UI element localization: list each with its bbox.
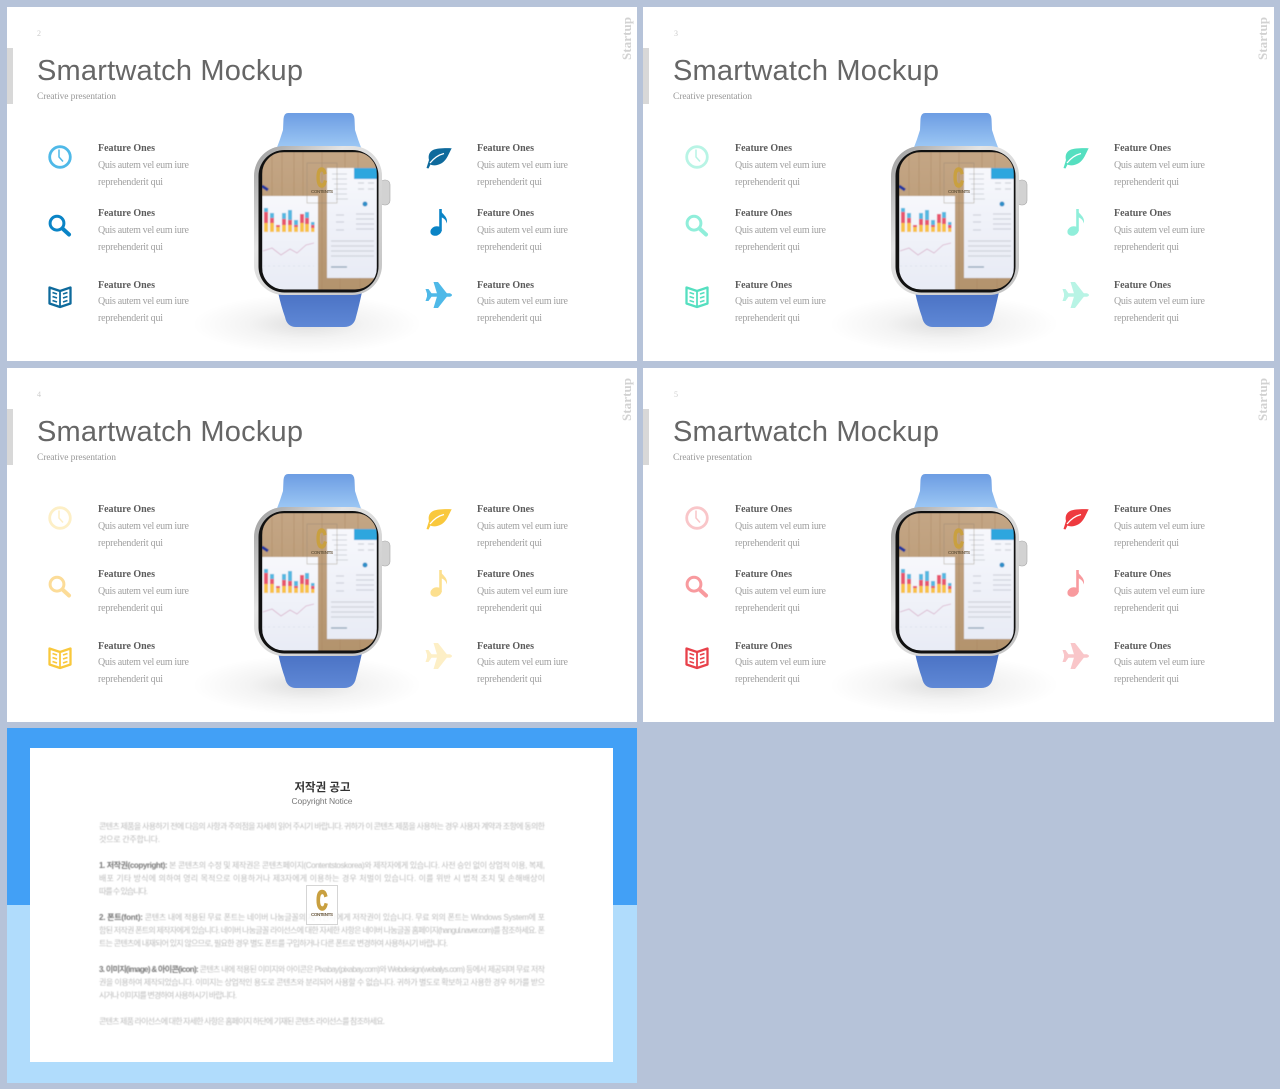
closing line: 콘텐츠 제품 라이선스에 대한 자세한 사항은 홈페이지 하단에 기재된 콘텐츠 라이선스를 참조하세요. <box>99 1016 385 1026</box>
icon: book <box>686 648 708 668</box>
side label: Startup <box>619 378 634 421</box>
feature 3 <box>735 280 827 324</box>
feature 5 <box>1114 208 1206 253</box>
feature 4: Feature Ones <box>477 143 534 154</box>
feature 4 <box>1114 143 1206 188</box>
title: Smartwatch Mockup <box>673 55 939 87</box>
feature 5: Quis autem vel eum iure <box>477 586 569 597</box>
watermark logo <box>306 886 338 924</box>
watch mockup: CONTENTS <box>948 550 970 555</box>
feature 1: Feature Ones <box>735 504 792 515</box>
page number: 2 <box>37 29 41 38</box>
feature 4: reprehenderit qui <box>477 177 542 188</box>
feature 6: Feature Ones <box>1114 641 1171 652</box>
feature 1: Feature Ones <box>98 504 155 515</box>
side label: Startup <box>619 17 634 60</box>
side label: Startup <box>1255 17 1270 60</box>
feature 1 <box>735 143 827 188</box>
title: Smartwatch Mockup <box>37 55 303 87</box>
panel: slide 2 blue <box>7 7 637 361</box>
feature 5 <box>1114 569 1206 614</box>
feature 6: Feature Ones <box>1114 280 1171 291</box>
feature 6 <box>1114 641 1206 685</box>
feature 5: reprehenderit qui <box>477 603 542 614</box>
feature 5: Feature Ones <box>477 208 534 219</box>
page number: 4 <box>37 390 41 399</box>
feature 4: Feature Ones <box>1114 504 1171 515</box>
panel: slide 4 yellow <box>7 368 637 722</box>
watch mockup: CONTENTS <box>311 189 333 194</box>
paragraph: copyright <box>99 860 545 896</box>
watch mockup: CONTENTS <box>948 189 970 194</box>
icon: plane <box>1062 282 1089 308</box>
feature 1 <box>98 143 190 188</box>
feature 2: reprehenderit qui <box>98 242 163 253</box>
paragraph: images and icons: 권을 이용하여 제작되었습니다. 이미지는 상업적인 용도로 콘텐츠와 분리되어 사용할 수 없습니다. 귀하가 별도로 확보하고 사용한 경우 허가를 받으 <box>99 977 545 987</box>
feature 1: reprehenderit qui <box>735 177 800 188</box>
icon: leaf <box>426 509 452 530</box>
feature 1: reprehenderit qui <box>735 538 800 549</box>
watch mockup <box>192 474 422 715</box>
feature 1 <box>735 504 827 549</box>
feature 3: reprehenderit qui <box>98 313 163 324</box>
feature 4 <box>1114 504 1206 549</box>
feature 4: Quis autem vel eum iure <box>1114 160 1206 171</box>
icon: leaf <box>1064 148 1089 168</box>
feature 2 <box>98 208 190 253</box>
icon: leaf <box>1064 509 1089 530</box>
page number: 5 <box>674 390 678 399</box>
feature 1: Feature Ones <box>98 143 155 154</box>
icon: clock <box>687 147 707 167</box>
watch mockup: C <box>953 524 964 557</box>
paragraph: images and icons: 시거나 이미지를 변경하여 사용하시기 바랍니다. <box>99 990 237 1000</box>
subtitle: Creative presentation <box>673 92 752 102</box>
feature 1: reprehenderit qui <box>98 177 163 188</box>
feature 4: Quis autem vel eum iure <box>477 160 569 171</box>
feature 3: reprehenderit qui <box>735 674 800 685</box>
feature 3: Quis autem vel eum iure <box>98 657 190 668</box>
feature 3 <box>98 641 190 685</box>
feature 6: Quis autem vel eum iure <box>1114 296 1206 307</box>
feature 5: Feature Ones <box>1114 208 1171 219</box>
feature 1 <box>98 504 190 549</box>
feature 5 <box>477 569 569 614</box>
feature 5: Quis autem vel eum iure <box>477 225 569 236</box>
feature 3: Feature Ones <box>735 280 792 291</box>
watch mockup: C <box>316 524 327 557</box>
copyright heading: 저작권 공고 <box>294 780 351 794</box>
watermark logo: CONTENTS <box>311 912 333 917</box>
icon: music note <box>1066 570 1084 598</box>
feature 5 <box>477 208 569 253</box>
feature 3 <box>735 641 827 685</box>
feature 4: Quis autem vel eum iure <box>1114 521 1206 532</box>
feature 3: reprehenderit qui <box>98 674 163 685</box>
feature 5: reprehenderit qui <box>1114 242 1179 253</box>
feature 6: Quis autem vel eum iure <box>1114 657 1206 668</box>
feature 5: Quis autem vel eum iure <box>1114 225 1206 236</box>
feature 1: Quis autem vel eum iure <box>98 521 190 532</box>
feature 2: Feature Ones <box>98 208 155 219</box>
feature 6: Feature Ones <box>477 280 534 291</box>
title: Smartwatch Mockup <box>673 416 939 448</box>
icon: music note <box>429 570 447 598</box>
feature 6 <box>477 641 569 685</box>
feature 5: reprehenderit qui <box>1114 603 1179 614</box>
icon: clock <box>687 508 707 528</box>
paragraph: copyright: 따를 수 있습니다. <box>99 886 148 896</box>
feature 3: Quis autem vel eum iure <box>735 657 827 668</box>
paragraph: images and icons: 3. 이미지(image) & 아이콘(icon): 콘텐츠 내에 적용된 이미지와 아이콘은 Pixabay(pixabay.com)와 Webdesign(webalys.com) 등에서 제공되며 무료 저작 <box>99 964 546 974</box>
feature 2 <box>98 569 190 614</box>
feature 4 <box>477 143 569 188</box>
icon: book <box>50 648 70 668</box>
feature 6: reprehenderit qui <box>1114 313 1179 324</box>
paragraph: font: 함된 저작권 폰트의 제작자에게 있습니다. 네이버 나눔글꼴 라이선스에 대한 자세한 사항은 네이버 나눔글꼴 홈페이지(hangul.naver.com)를 참조하세요. 폰 <box>99 925 545 935</box>
feature 1: Quis autem vel eum iure <box>735 521 827 532</box>
feature 2: Feature Ones <box>735 569 792 580</box>
feature 6 <box>477 280 569 324</box>
feature 2: reprehenderit qui <box>98 603 163 614</box>
icon: search <box>50 216 69 234</box>
feature 4: reprehenderit qui <box>1114 177 1179 188</box>
watch mockup <box>192 113 422 354</box>
feature 1: Quis autem vel eum iure <box>98 160 190 171</box>
paragraph: font: 트는 콘텐츠에 내재되어 있지 않으므로, 필요한 경우 별도 폰트를 구입하거나 다른 폰트로 변경하여 사용하시기 바랍니다. <box>99 938 448 948</box>
subtitle: Creative presentation <box>37 453 116 463</box>
paragraph: copyright: 배포 기타 방식에 의하여 영리 목적으로 이용하거나 제3자에게 이용하는 경우 처벌이 있습니다. 이를 위반 시 법적 조치 및 손해배상이 <box>99 873 545 883</box>
feature 1: Feature Ones <box>735 143 792 154</box>
feature 4: Quis autem vel eum iure <box>477 521 569 532</box>
feature 2: Feature Ones <box>735 208 792 219</box>
paragraph: images and icons <box>99 964 546 1000</box>
icon: clock <box>50 508 70 528</box>
feature 6 <box>1114 280 1206 324</box>
icon: music note <box>429 209 447 237</box>
watch mockup <box>829 474 1059 715</box>
feature 5: reprehenderit qui <box>477 242 542 253</box>
intro paragraph: 콘텐츠 제품을 사용하기 전에 다음의 사항과 주의점을 자세히 읽어 주시기 바랍니다. 귀하가 이 콘텐츠 제품을 사용하는 경우 사용자 계약과 조항에 동의한 <box>99 821 546 831</box>
feature 2: reprehenderit qui <box>735 242 800 253</box>
copyright subheading: Copyright Notice <box>292 796 353 806</box>
feature 5: Feature Ones <box>1114 569 1171 580</box>
panel: copyright notice <box>7 728 637 1083</box>
feature 3: Quis autem vel eum iure <box>98 296 190 307</box>
paragraph: copyright: 1. 저작권(copyright): 본 콘텐츠의 수정 및 제작권은 콘텐츠페이지(Contentstoskorea)와 제작자에게 있습니다. 사전 승인 없이 상업적 이용, 복제, <box>99 860 545 870</box>
icon: clock <box>50 147 70 167</box>
feature 6: reprehenderit qui <box>477 313 542 324</box>
panel: slide 3 mint <box>643 7 1274 361</box>
feature 1: Quis autem vel eum iure <box>735 160 827 171</box>
feature 3: reprehenderit qui <box>735 313 800 324</box>
feature 5: Quis autem vel eum iure <box>1114 586 1206 597</box>
feature 6: Feature Ones <box>477 641 534 652</box>
feature 5: Feature Ones <box>477 569 534 580</box>
feature 6: Quis autem vel eum iure <box>477 296 569 307</box>
icon: plane <box>426 643 452 669</box>
feature 6: reprehenderit qui <box>477 674 542 685</box>
feature 1: reprehenderit qui <box>98 538 163 549</box>
feature 2: Quis autem vel eum iure <box>735 225 827 236</box>
watch mockup: C <box>316 163 327 196</box>
feature 3: Feature Ones <box>98 280 155 291</box>
feature 3: Quis autem vel eum iure <box>735 296 827 307</box>
feature 2: Quis autem vel eum iure <box>98 586 190 597</box>
title: Smartwatch Mockup <box>37 416 303 448</box>
icon: book <box>686 288 708 307</box>
feature 3: Feature Ones <box>98 641 155 652</box>
watermark logo: C <box>316 886 328 920</box>
side label: Startup <box>1255 378 1270 421</box>
feature 2: Feature Ones <box>98 569 155 580</box>
feature 3 <box>98 280 190 324</box>
feature 2: Quis autem vel eum iure <box>735 586 827 597</box>
icon: search <box>50 577 69 596</box>
feature 2 <box>735 208 827 253</box>
icon: search <box>687 577 706 596</box>
subtitle: Creative presentation <box>37 92 116 102</box>
icon: book <box>50 288 70 307</box>
feature 2: reprehenderit qui <box>735 603 800 614</box>
icon: music note <box>1066 209 1084 237</box>
watch mockup: CONTENTS <box>311 550 333 555</box>
intro paragraph: 것으로 간주합니다. <box>99 834 160 844</box>
icon: leaf <box>426 148 452 168</box>
feature 2: Quis autem vel eum iure <box>98 225 190 236</box>
icon: plane <box>1062 643 1089 669</box>
feature 4 <box>477 504 569 549</box>
watch mockup <box>829 113 1059 354</box>
subtitle: Creative presentation <box>673 453 752 463</box>
intro paragraph <box>99 821 546 844</box>
icon: plane <box>426 282 452 308</box>
feature 6: reprehenderit qui <box>1114 674 1179 685</box>
page number: 3 <box>674 29 678 38</box>
feature 6: Quis autem vel eum iure <box>477 657 569 668</box>
paragraph: font: 2. 폰트(font): 콘텐츠 내에 적용된 무료 폰트는 네이버 나눔글꼴의 제작권자에게 저작권이 있습니다. 무료 외의 폰트는 Windows System에 포 <box>99 912 545 922</box>
panel: slide 5 red <box>643 368 1274 722</box>
paragraph: font <box>99 912 545 948</box>
feature 3: Feature Ones <box>735 641 792 652</box>
feature 4: reprehenderit qui <box>1114 538 1179 549</box>
feature 2 <box>735 569 827 614</box>
watch mockup: C <box>953 163 964 196</box>
feature 4: Feature Ones <box>1114 143 1171 154</box>
feature 4: reprehenderit qui <box>477 538 542 549</box>
feature 4: Feature Ones <box>477 504 534 515</box>
icon: search <box>687 216 706 234</box>
